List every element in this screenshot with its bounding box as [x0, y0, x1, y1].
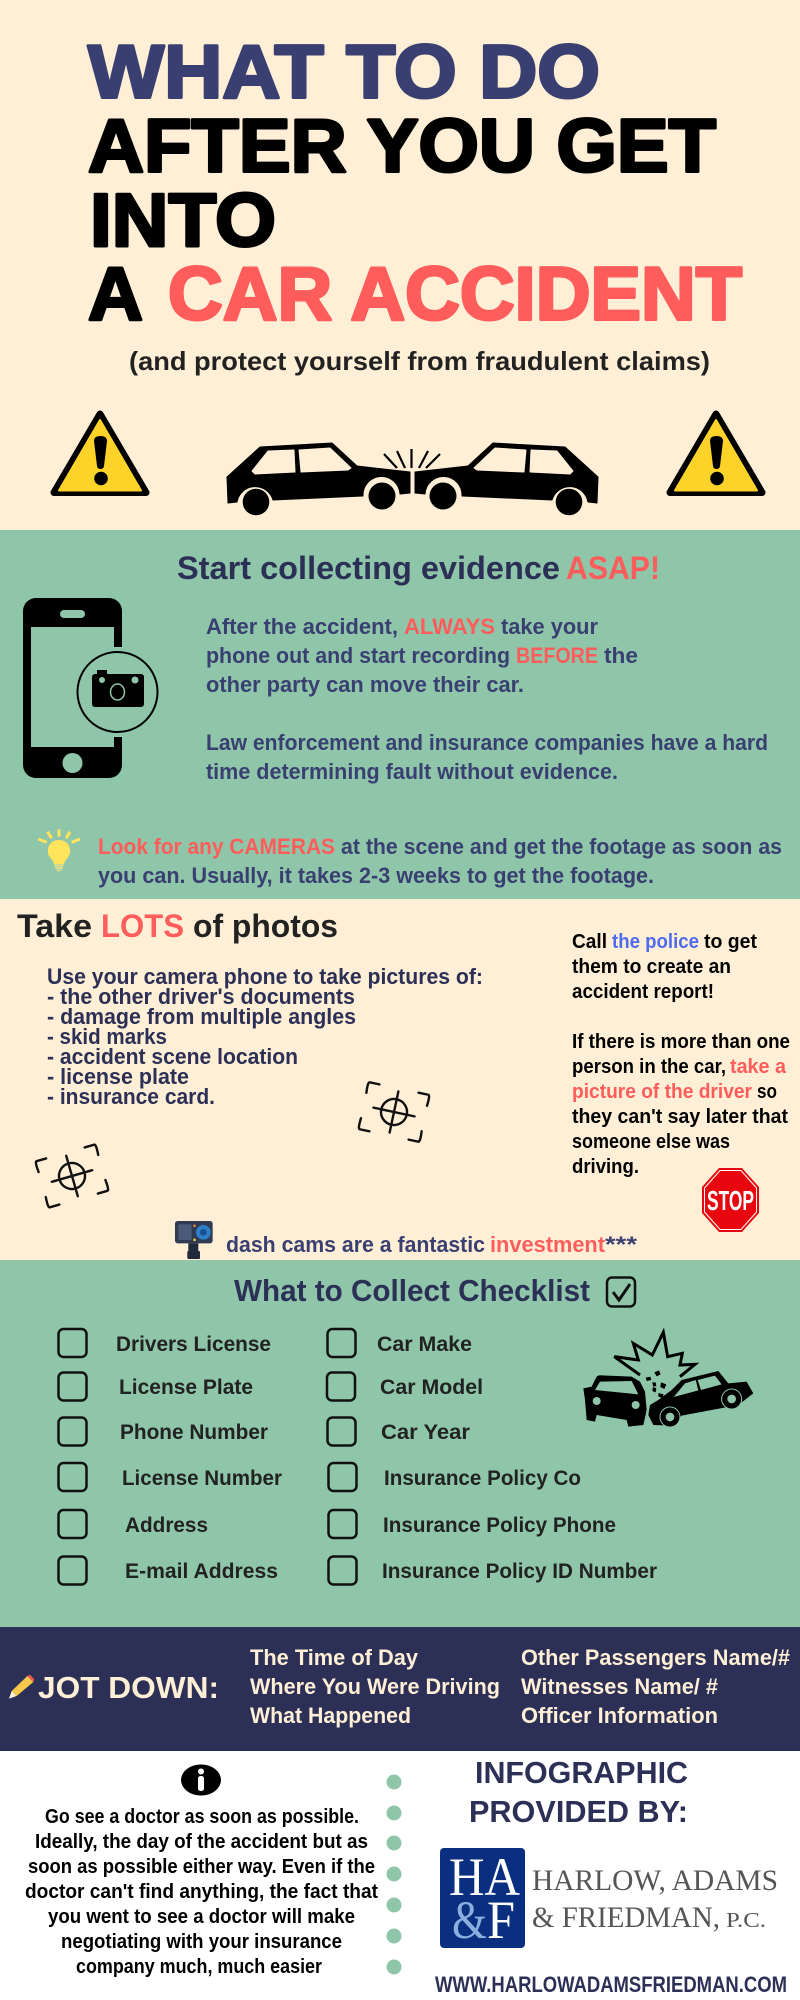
checklist left column: Address	[125, 1513, 208, 1537]
checklist left column	[58, 1329, 283, 1584]
text block: call the police: picture of the driver	[572, 1080, 752, 1103]
list: photos to take	[47, 964, 483, 1109]
icon: pencil	[9, 1675, 34, 1699]
checklist right column	[327, 1329, 658, 1584]
text block: see a doctor: you went to see a doctor will make	[48, 1905, 355, 1928]
icon: info	[181, 1764, 221, 1796]
heading: infographic provided by	[469, 1755, 688, 1829]
text block: always record: phone out and start recording	[206, 643, 510, 668]
title: INTO	[90, 178, 276, 262]
text block: call the police: take a	[730, 1055, 787, 1078]
heading: infographic provided by: INFOGRAPHIC	[475, 1755, 688, 1790]
title: A	[88, 252, 143, 336]
checklist right column: Car Model	[380, 1375, 483, 1399]
checklist left column: E-mail Address	[125, 1559, 278, 1583]
text: dash cams tip: ***	[605, 1232, 637, 1257]
heading: infographic provided by: PROVIDED BY:	[469, 1794, 688, 1829]
checklist left column: Drivers License	[116, 1332, 271, 1356]
checklist right column: Car Make	[377, 1332, 472, 1356]
icon: stop sign	[702, 1168, 759, 1232]
icon: car crash	[583, 1332, 753, 1427]
icon: camera focus target right	[358, 1082, 430, 1142]
text block: see a doctor: soon as possible either way. Even if the	[28, 1855, 375, 1878]
logo: Harlow, Adams and Friedman	[440, 1847, 778, 1950]
text block: call the police: so	[757, 1080, 777, 1103]
checklist left column: License Number	[122, 1466, 283, 1490]
text block: call the police: accident report!	[572, 980, 714, 1003]
icon: warning triangle right	[670, 414, 762, 492]
panel: footer	[0, 1751, 800, 2000]
text block: call the police: driving.	[572, 1155, 639, 1178]
list: photos to take: - damage from multiple angles	[47, 1004, 356, 1029]
icon: camera focus target left	[35, 1144, 109, 1208]
icon: light bulb	[38, 829, 80, 870]
heading: what to collect checklist: What to Collect Checklist	[234, 1273, 590, 1308]
jot down list left	[250, 1645, 500, 1728]
text: dash cams tip	[226, 1232, 637, 1257]
panel: title header	[0, 0, 800, 530]
text block: see a doctor: Ideally, the day of the accident but as	[35, 1830, 368, 1853]
jot down list right: Other Passengers Name/#	[521, 1645, 790, 1670]
jot down list left: The Time of Day	[250, 1645, 419, 1670]
subtitle: (and protect yourself from fraudulent claims)	[129, 346, 710, 376]
text block: always record	[206, 614, 768, 784]
panel: start collecting evidence	[0, 530, 800, 899]
icon: stop sign: STOP	[707, 1185, 754, 1216]
logo: Harlow, Adams and Friedman: &	[452, 1890, 487, 1950]
text block: look for cameras: at the scene and get the footage as soon as	[341, 834, 782, 859]
list: photos to take: - skid marks	[47, 1024, 167, 1049]
list: photos to take: - the other driver's documents	[47, 984, 355, 1009]
heading: start collecting evidence: Start collecting evidence	[177, 550, 560, 586]
checklist right column: Insurance Policy Phone	[383, 1513, 616, 1537]
text block: always record: ALWAYS	[404, 614, 495, 639]
text block: look for cameras	[98, 834, 782, 888]
icon: dash cam	[175, 1221, 213, 1259]
dotted divider	[386, 1774, 402, 1974]
jot down list left: What Happened	[250, 1703, 411, 1728]
panel: jot down	[0, 1627, 800, 1751]
text block: look for cameras: you can. Usually, it takes 2-3 weeks to get the footage.	[98, 863, 654, 888]
logo: Harlow, Adams and Friedman: P.C.	[726, 1908, 766, 1932]
title: CAR ACCIDENT	[168, 252, 742, 336]
jot down list right: Witnesses Name/ #	[521, 1674, 718, 1699]
text block: call the police: them to create an	[572, 955, 731, 978]
text block: call the police: Call	[572, 930, 607, 953]
list: photos to take: - accident scene location	[47, 1044, 298, 1069]
jot down list right	[521, 1645, 790, 1728]
title	[88, 30, 742, 336]
text block: see a doctor: doctor can't find anything, the fact that	[25, 1880, 378, 1903]
text block: call the police	[572, 930, 790, 1178]
text block: always record: After the accident,	[206, 614, 398, 639]
text block: call the police: person in the car,	[572, 1055, 726, 1078]
text block: always record: other party can move their car.	[206, 672, 524, 697]
checklist right column: Car Year	[381, 1420, 471, 1444]
text block: always record: time determining fault without evidence.	[206, 759, 618, 784]
checklist right column: Insurance Policy ID Number	[382, 1559, 658, 1583]
heading: take lots of photos: Take	[17, 908, 92, 944]
icon: warning triangle left	[54, 414, 146, 492]
list: photos to take: Use your camera phone to take pictures of:	[47, 964, 483, 989]
text block: see a doctor	[25, 1805, 378, 1978]
text block: always record: Law enforcement and insurance companies have a hard	[206, 730, 768, 755]
checklist right column: Insurance Policy Co	[384, 1466, 581, 1490]
text block: look for cameras: Look for any CAMERAS	[98, 834, 335, 859]
jot down list right: Officer Information	[521, 1703, 718, 1728]
text: dash cams tip: dash cams are a fantastic	[226, 1232, 485, 1257]
text block: see a doctor: negotiating with your insurance	[61, 1930, 342, 1953]
text block: always record: BEFORE	[516, 643, 598, 668]
panel: take lots of photos	[0, 899, 800, 1260]
text block: call the police: someone else was	[572, 1130, 730, 1153]
logo: Harlow, Adams and Friedman: HA	[449, 1847, 520, 1907]
text block: see a doctor: Go see a doctor as soon as possible.	[45, 1805, 359, 1828]
heading: take lots of photos	[17, 908, 338, 944]
text: dash cams tip: investment	[490, 1232, 605, 1257]
heading: take lots of photos: of photos	[193, 908, 338, 944]
icon: phone with camera	[23, 598, 158, 778]
list: photos to take: - insurance card.	[47, 1084, 215, 1109]
heading: start collecting evidence: ASAP!	[566, 550, 660, 586]
text block: call the police: the police	[612, 930, 699, 953]
heading: take lots of photos: LOTS	[101, 908, 184, 944]
logo: Harlow, Adams and Friedman: F	[487, 1890, 515, 1950]
icon: two cars colliding	[227, 443, 598, 515]
text block: always record: the	[604, 643, 638, 668]
icon: checked box	[607, 1278, 635, 1306]
text block: call the police: they can't say later that	[572, 1105, 788, 1128]
checklist left column: License Plate	[119, 1375, 253, 1399]
text block: see a doctor: company much, much easier	[76, 1955, 322, 1978]
text block: call the police: to get	[704, 930, 757, 953]
checklist left column: Phone Number	[120, 1420, 269, 1444]
logo: Harlow, Adams and Friedman: & FRIEDMAN,	[532, 1901, 720, 1934]
panel: what to collect checklist	[0, 1260, 800, 1627]
title: WHAT TO DO	[88, 30, 600, 114]
text block: always record: take your	[501, 614, 598, 639]
title: AFTER YOU GET	[88, 104, 716, 188]
logo: Harlow, Adams and Friedman: HARLOW, ADAMS	[532, 1864, 778, 1897]
list: photos to take: - license plate	[47, 1064, 189, 1089]
jot down list left: Where You Were Driving	[250, 1674, 500, 1699]
heading: jot down: JOT DOWN:	[38, 1670, 219, 1705]
